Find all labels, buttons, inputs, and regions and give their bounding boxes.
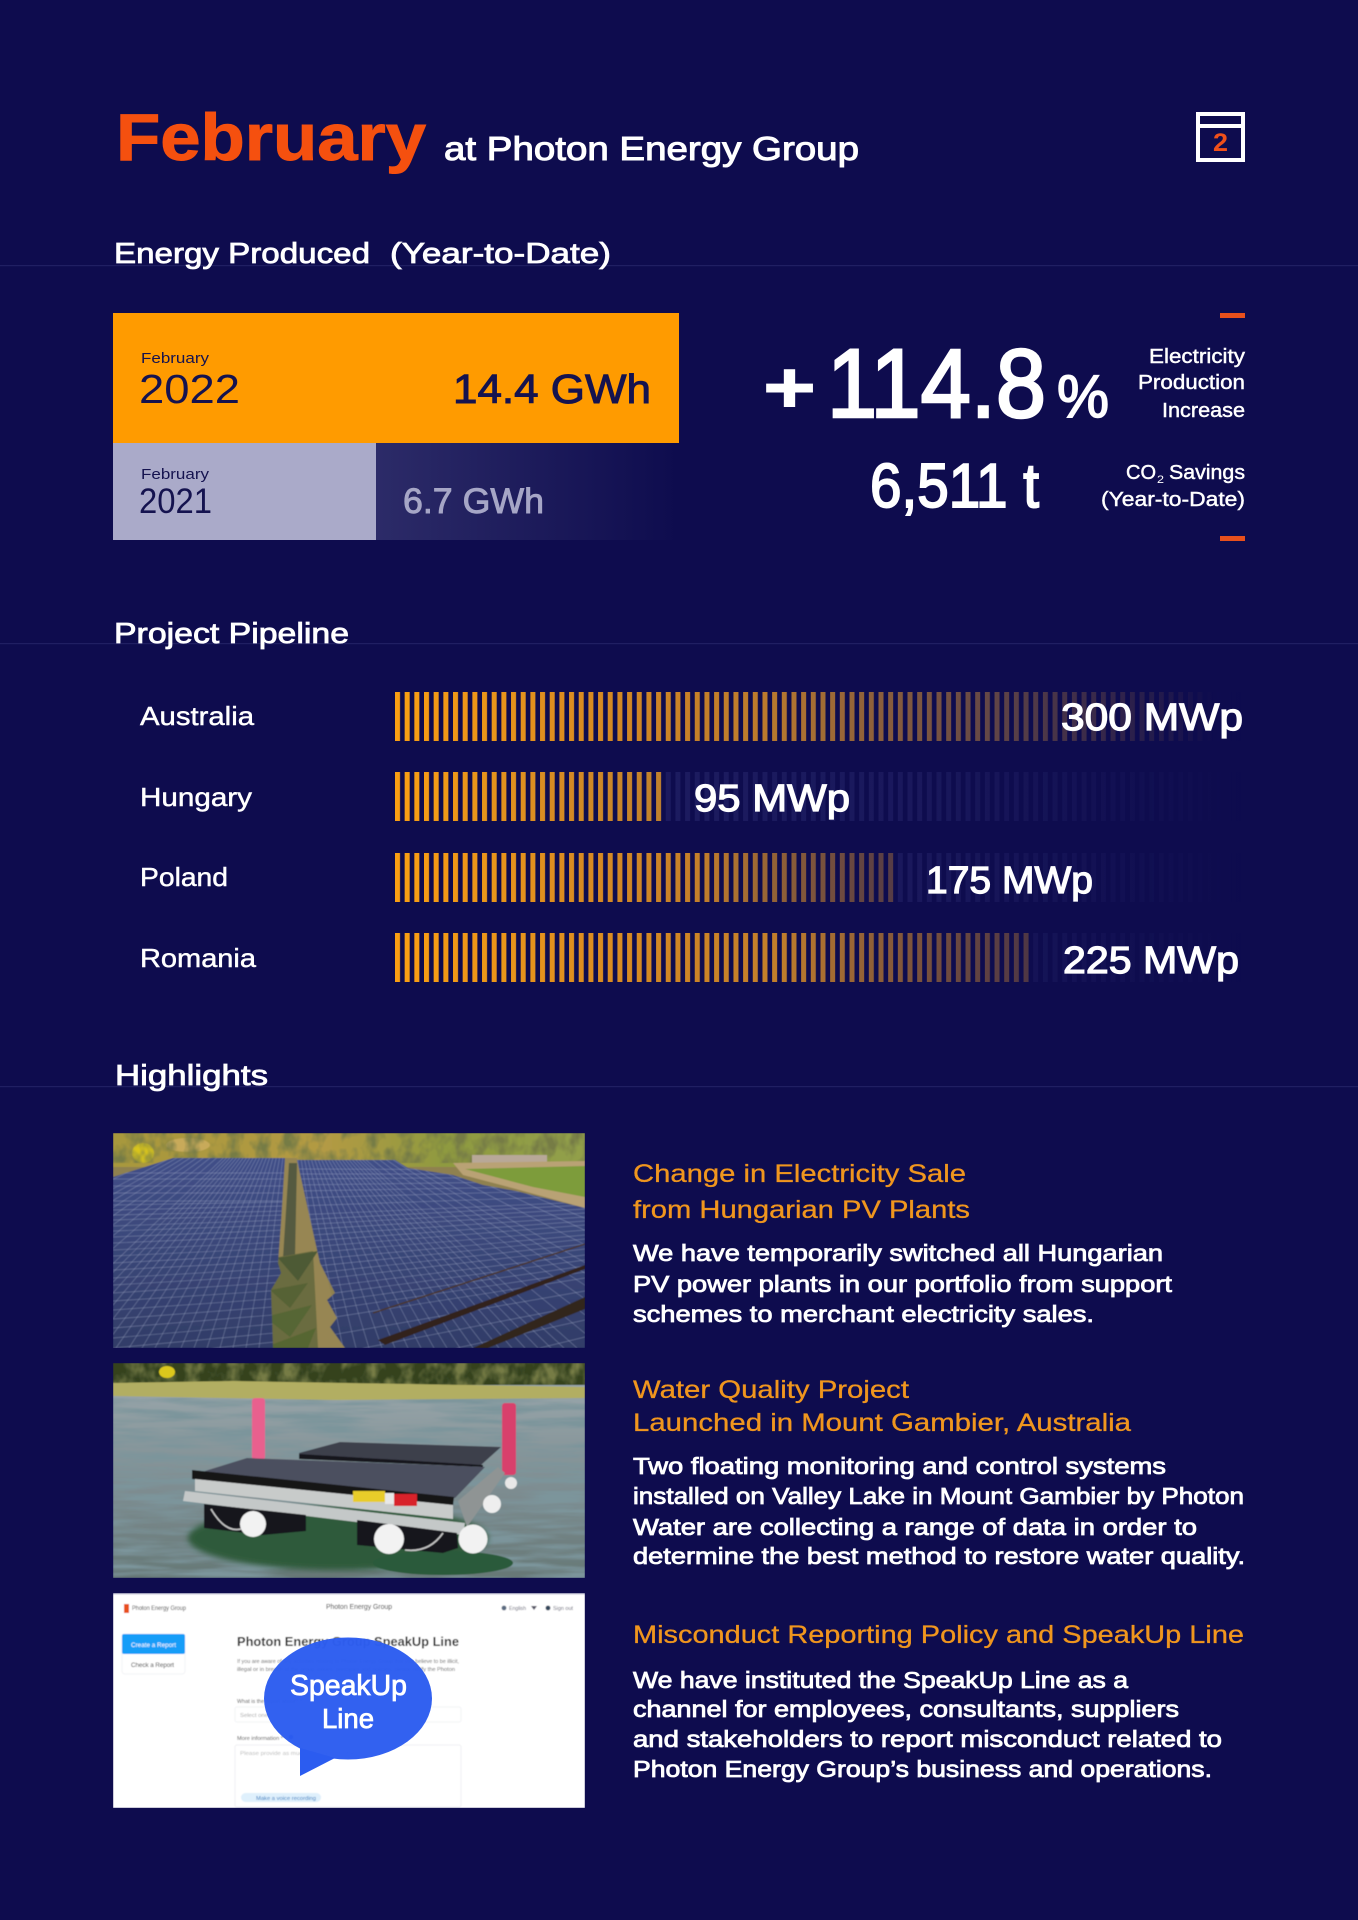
text block: change in electricity sale: PV power plants in our portfolio from support <box>633 1271 1173 1297</box>
photo: SpeakUp Line web form: Create a Report <box>131 1642 176 1649</box>
row: Hungary 95 MWp: Hungary <box>140 782 252 812</box>
text block: misconduct reporting policy: Photon Energy Group’s business and operations. <box>633 1756 1212 1782</box>
title: February <box>116 100 426 174</box>
row: Hungary 95 MWp <box>142 772 1047 821</box>
stat: production increase: Production <box>1138 372 1245 394</box>
text block: water quality project: Launched in Mount Gambier, Australia <box>633 1409 1131 1437</box>
row: Australia 300 MWp: 300 MWp <box>1061 697 1243 739</box>
photo: SpeakUp Line web form: Photon Energy Group SpeakUp Line <box>237 1635 459 1649</box>
stat: production increase: 114.8 <box>827 329 1046 438</box>
stat: production increase: + <box>763 348 816 428</box>
text block: change in electricity sale: Change in Electricity Sale <box>633 1160 966 1188</box>
heading: energy produced <box>114 238 611 270</box>
title <box>116 100 859 174</box>
stat: production increase <box>763 329 1245 438</box>
bar: February 2022: 2022 <box>139 366 240 412</box>
stat: production increase: % <box>1057 363 1109 430</box>
photo: SpeakUp Line web form: If you are aware of any activities relating to Photon Energy Group that you believe to be illicit, <box>237 1659 459 1665</box>
row: Australia 300 MWp: Australia <box>140 701 255 731</box>
photo: solar power plant <box>113 1133 585 1348</box>
row: Romania 225 MWp: Romania <box>140 943 257 973</box>
text block: change in electricity sale: We have temporarily switched all Hungarian <box>633 1240 1163 1266</box>
stat: CO2 savings: Savings <box>1169 462 1245 484</box>
photo: SpeakUp Line web form: What is the report about? * <box>237 1699 303 1705</box>
photo: SpeakUp Line web form: Please provide as much detail as possible <box>240 1751 355 1757</box>
panel: energy comparison bars <box>113 313 679 540</box>
stat: production increase: Increase <box>1162 400 1245 422</box>
row: Hungary 95 MWp: 95 MWp <box>694 778 850 820</box>
text block: misconduct reporting policy: Misconduct Reporting Policy and SpeakUp Line <box>633 1621 1244 1649</box>
photo: SpeakUp Line web form <box>113 1593 585 1808</box>
bar: February 2021: 6.7 GWh <box>403 482 544 521</box>
bar: February 2022: 14.4 GWh <box>453 366 651 412</box>
photo: SpeakUp Line web form: Make a voice recording <box>256 1796 316 1802</box>
row: Poland 175 MWp: Poland <box>140 862 228 892</box>
bar: February 2021 <box>113 443 679 540</box>
heading: energy produced: Energy Produced <box>114 238 370 270</box>
bar: February 2021: 2021 <box>139 482 212 521</box>
text block: change in electricity sale: schemes to merchant electricity sales. <box>633 1301 1094 1327</box>
stat: CO2 savings: (Year-to-Date) <box>1101 489 1245 511</box>
panel: key stats <box>763 313 1245 541</box>
stat: CO2 savings: 2 <box>1157 474 1164 486</box>
heading: energy produced: (Year-to-Date) <box>390 238 611 270</box>
row: Poland 175 MWp <box>142 853 1092 902</box>
row: Poland 175 MWp: 175 MWp <box>926 860 1093 902</box>
text block: misconduct reporting policy: We have instituted the SpeakUp Line as a <box>633 1667 1128 1693</box>
chart: project pipeline bars <box>140 692 1245 982</box>
text block: water quality project <box>633 1376 1245 1569</box>
photo: SpeakUp Line web form: Photon Energy Group <box>326 1604 392 1611</box>
bar: February 2022: February <box>141 351 210 367</box>
text block: misconduct reporting policy <box>633 1621 1244 1782</box>
photo: SpeakUp Line web form: More information * <box>237 1736 284 1742</box>
photo: SpeakUp Line web form: English <box>509 1606 526 1612</box>
photo: SpeakUp Line web form: Sign out <box>553 1606 573 1612</box>
photo: SpeakUp Line web form: Check a Report <box>131 1662 174 1669</box>
text block: water quality project: installed on Valley Lake in Mount Gambier by Photon <box>633 1483 1244 1509</box>
row: Romania 225 MWp: 225 MWp <box>1063 940 1239 982</box>
callout: SpeakUp Line speech bubble: SpeakUp <box>290 1670 407 1702</box>
bar: February 2021: February <box>141 467 210 483</box>
stat: production increase: Electricity <box>1149 346 1245 368</box>
text block: water quality project: Water are collecting a range of data in order to <box>633 1514 1197 1540</box>
text block: misconduct reporting policy: and stakeholders to report misconduct related to <box>633 1726 1222 1752</box>
bar: February 2022 <box>113 313 679 443</box>
text block: water quality project: Two floating monitoring and control systems <box>633 1453 1166 1479</box>
text block: water quality project: determine the best method to restore water quality. <box>633 1543 1245 1569</box>
row: Australia 300 MWp <box>140 692 1245 741</box>
stat: CO2 savings: CO <box>1126 462 1156 484</box>
photo: floating water monitoring system <box>113 1363 585 1578</box>
heading: project pipeline: Project Pipeline <box>114 618 349 650</box>
icon: calendar <box>1198 114 1243 160</box>
photo: SpeakUp Line web form: Photon Energy Group <box>132 1606 187 1612</box>
photo: SpeakUp Line web form: Select one <box>240 1713 268 1719</box>
icon: calendar: 2 <box>1213 129 1228 157</box>
text block: water quality project: Water Quality Project <box>633 1376 909 1404</box>
stat: CO2 savings <box>870 452 1245 521</box>
callout: SpeakUp Line speech bubble <box>264 1638 432 1776</box>
callout: SpeakUp Line speech bubble: Line <box>322 1703 374 1734</box>
row: Romania 225 MWp <box>140 933 1245 982</box>
text block: misconduct reporting policy: channel for employees, consultants, suppliers <box>633 1696 1179 1722</box>
stat: CO2 savings: 6,511 t <box>870 452 1039 521</box>
photo: SpeakUp Line web form: illegal or in breach of the group values, principles and policies, please notify the Photon <box>237 1667 455 1673</box>
text block: change in electricity sale: from Hungarian PV Plants <box>633 1196 970 1224</box>
title: at Photon Energy Group <box>444 130 859 167</box>
heading: highlights: Highlights <box>115 1060 268 1092</box>
text block: change in electricity sale <box>633 1160 1173 1327</box>
